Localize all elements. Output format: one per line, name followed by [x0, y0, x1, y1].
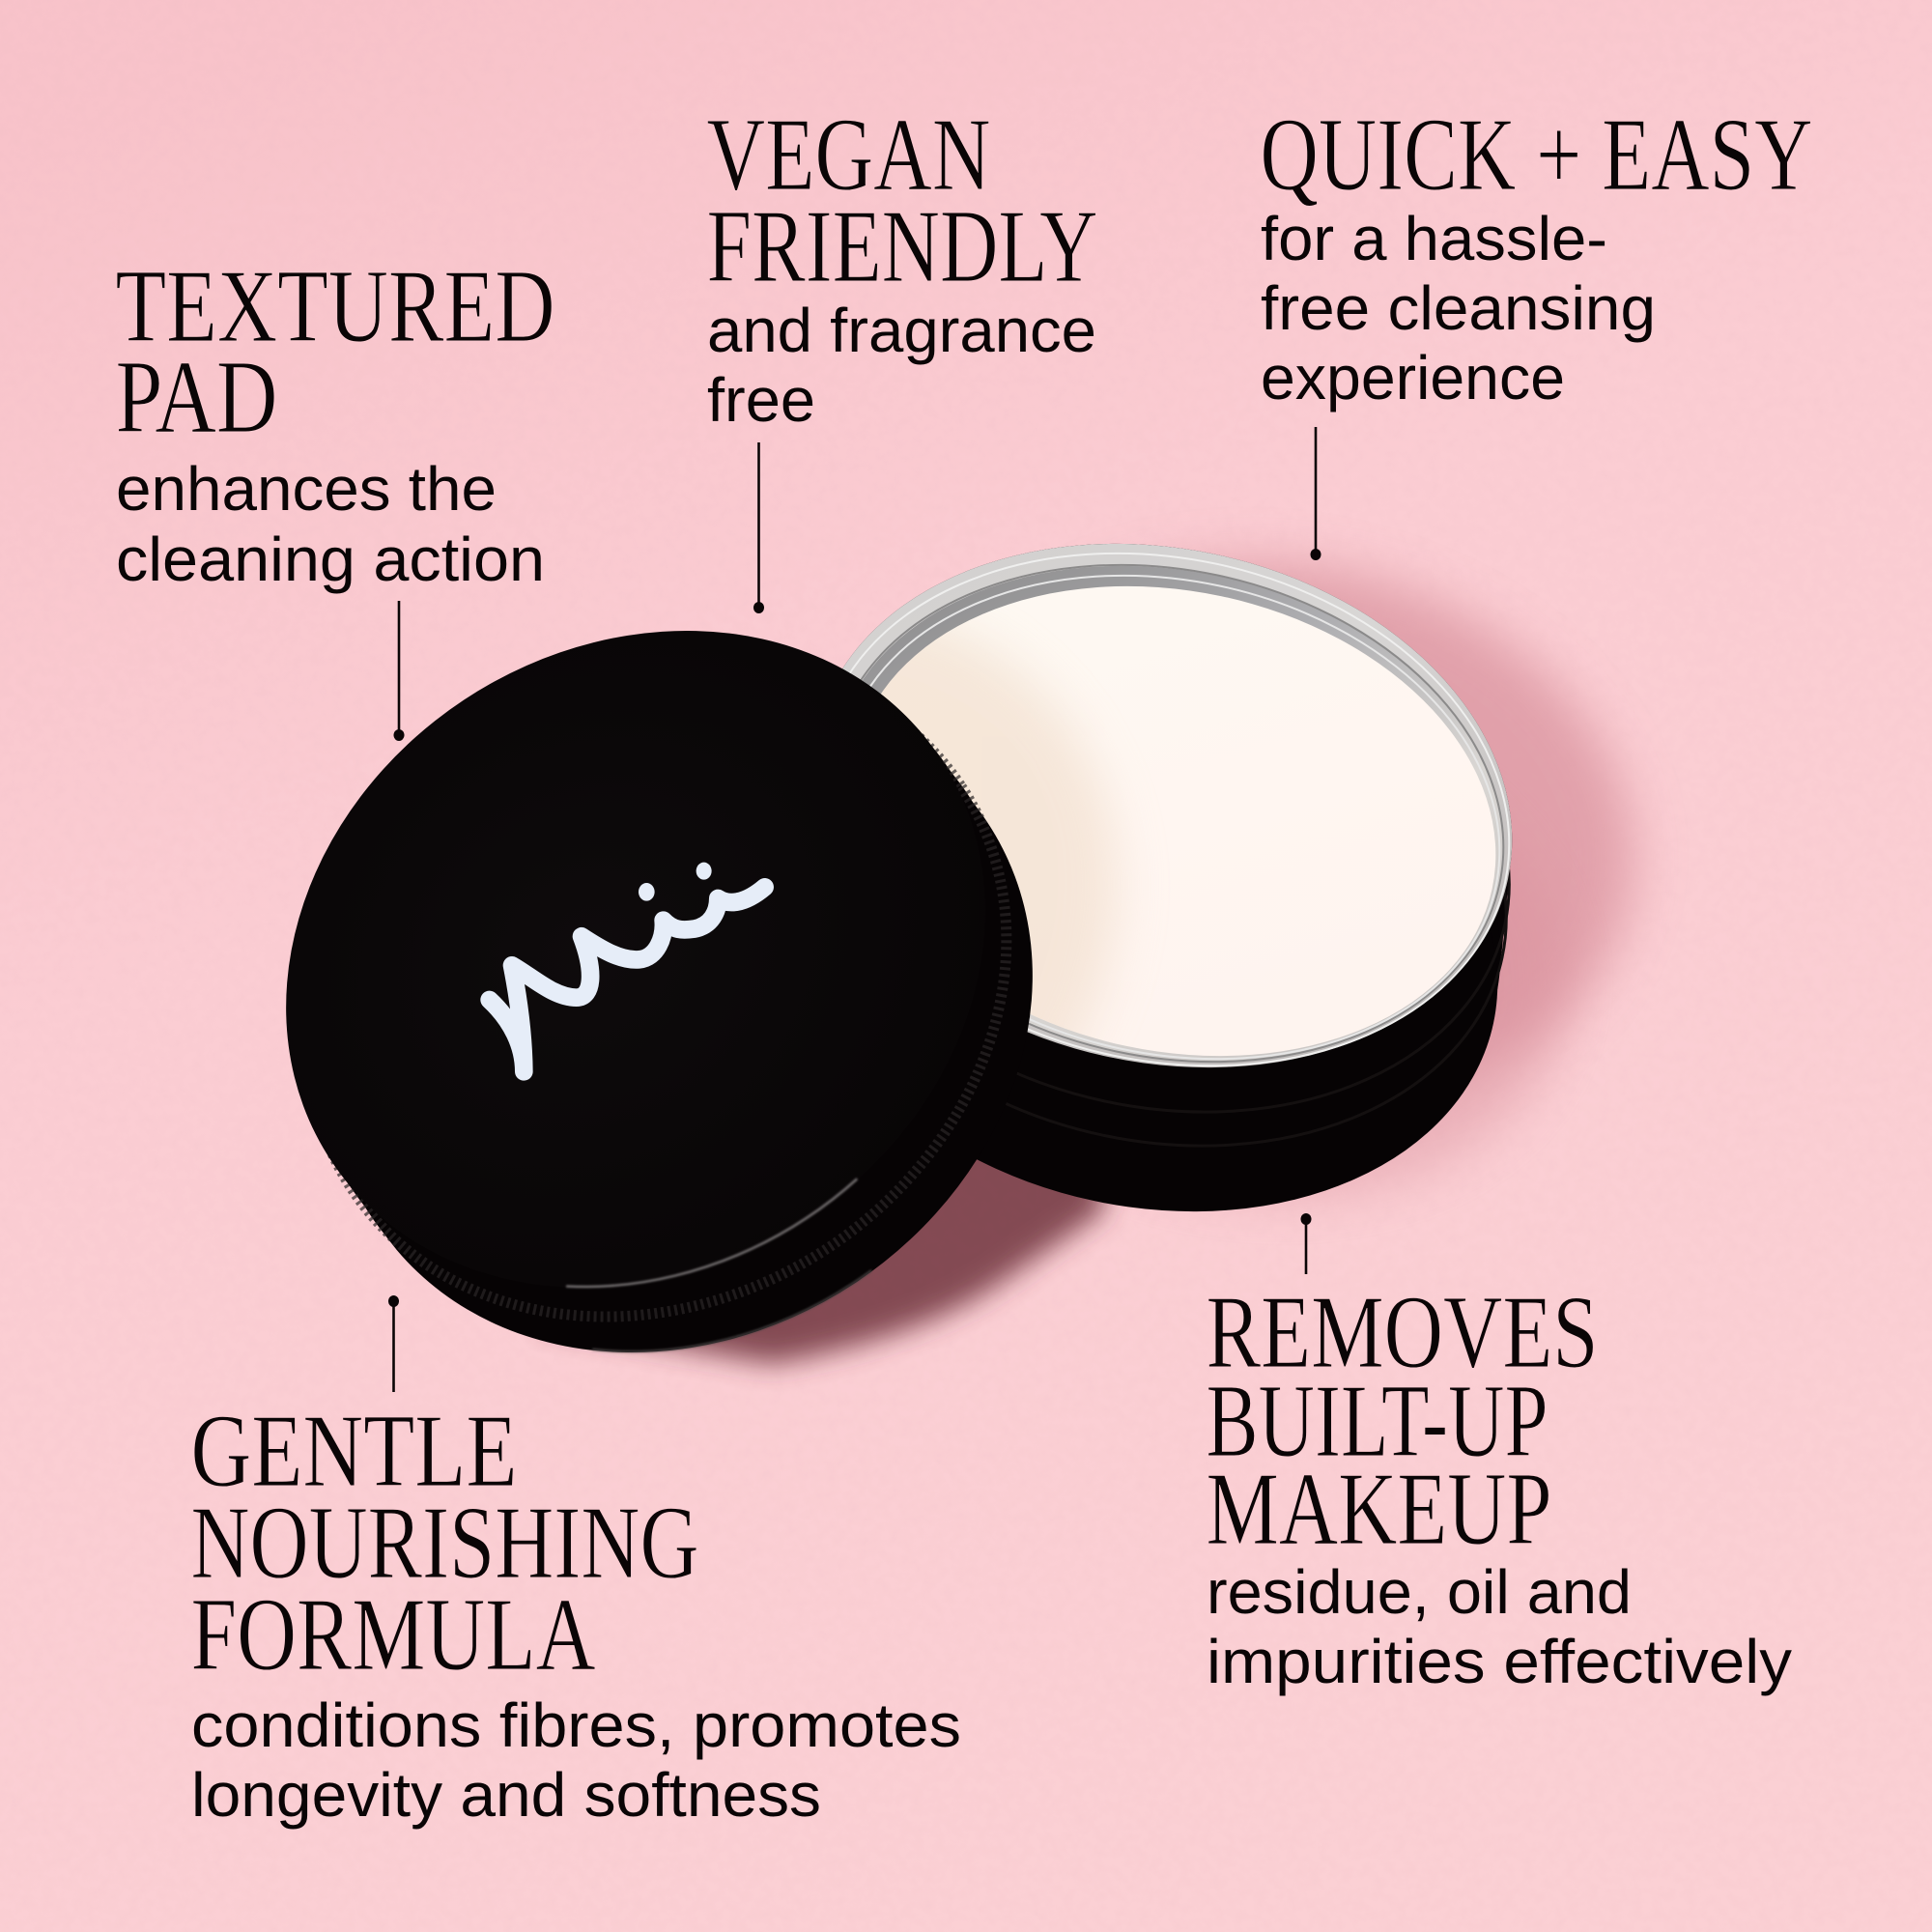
- callout: vegan friendly: free: [707, 365, 815, 435]
- callout: textured pad: PAD: [116, 340, 278, 455]
- callout: vegan friendly: [707, 98, 1097, 435]
- rim thread ridges: [771, 492, 1557, 1127]
- arrow: vegan friendly leader: [753, 442, 764, 613]
- callout: gentle nourishing formula: FORMULA: [191, 1577, 595, 1692]
- callout: quick + easy: experience: [1261, 343, 1565, 412]
- icon: mii logo: [490, 863, 765, 1071]
- callout: textured pad: TEXTURED: [116, 249, 554, 364]
- callout: removes built-up makeup: residue, oil and: [1207, 1557, 1632, 1627]
- callout: vegan friendly: FRIENDLY: [707, 189, 1097, 304]
- callout: vegan friendly: VEGAN: [707, 98, 991, 213]
- silver rim: [763, 481, 1561, 1130]
- callout: gentle nourishing formula: [191, 1394, 961, 1830]
- callout: removes built-up makeup: impurities effectively: [1207, 1627, 1792, 1696]
- lid: [159, 498, 1159, 1485]
- lid top surface: [159, 498, 1112, 1420]
- tin body: [749, 481, 1561, 1274]
- callout: vegan friendly: and fragrance: [707, 296, 1096, 365]
- arrow: removes makeup leader: [1300, 1213, 1312, 1274]
- lid rim highlight: [160, 499, 1111, 1419]
- arrow: quick + easy leader: [1310, 427, 1321, 560]
- lid bottom edge: [208, 564, 1158, 1484]
- callout: textured pad: [116, 249, 554, 594]
- callout: quick + easy: for a hassle-: [1261, 204, 1607, 273]
- lid knurled band: [181, 527, 1133, 1449]
- callout: removes built-up makeup: MAKEUP: [1206, 1452, 1551, 1567]
- inner wall: [784, 505, 1551, 1123]
- arrow: textured pad leader: [394, 601, 404, 741]
- tin thread highlights: [757, 526, 1558, 1208]
- callout: textured pad: enhances the: [116, 454, 497, 524]
- callout: gentle nourishing formula: conditions fibres, promotes: [191, 1690, 961, 1760]
- lid side wall: [169, 511, 1159, 1485]
- lid shade on balm: [881, 624, 1126, 1036]
- callout: removes built-up makeup: [1206, 1275, 1792, 1696]
- callout: removes built-up makeup: BUILT-UP: [1206, 1364, 1548, 1479]
- balm surface: [808, 528, 1540, 1114]
- open tin with balm: [842, 543, 1513, 1211]
- callout: gentle nourishing formula: GENTLE: [191, 1394, 518, 1509]
- product shadow on surface: [541, 499, 1685, 1364]
- callout: gentle nourishing formula: NOURISHING: [191, 1486, 699, 1601]
- arrow: gentle formula leader: [388, 1295, 399, 1392]
- callout: gentle nourishing formula: longevity and softness: [191, 1760, 821, 1830]
- callout: textured pad: cleaning action: [116, 525, 545, 594]
- callout: removes built-up makeup: REMOVES: [1206, 1275, 1598, 1390]
- callout: quick + easy: [1260, 98, 1812, 412]
- callout: quick + easy: free cleansing: [1261, 273, 1656, 343]
